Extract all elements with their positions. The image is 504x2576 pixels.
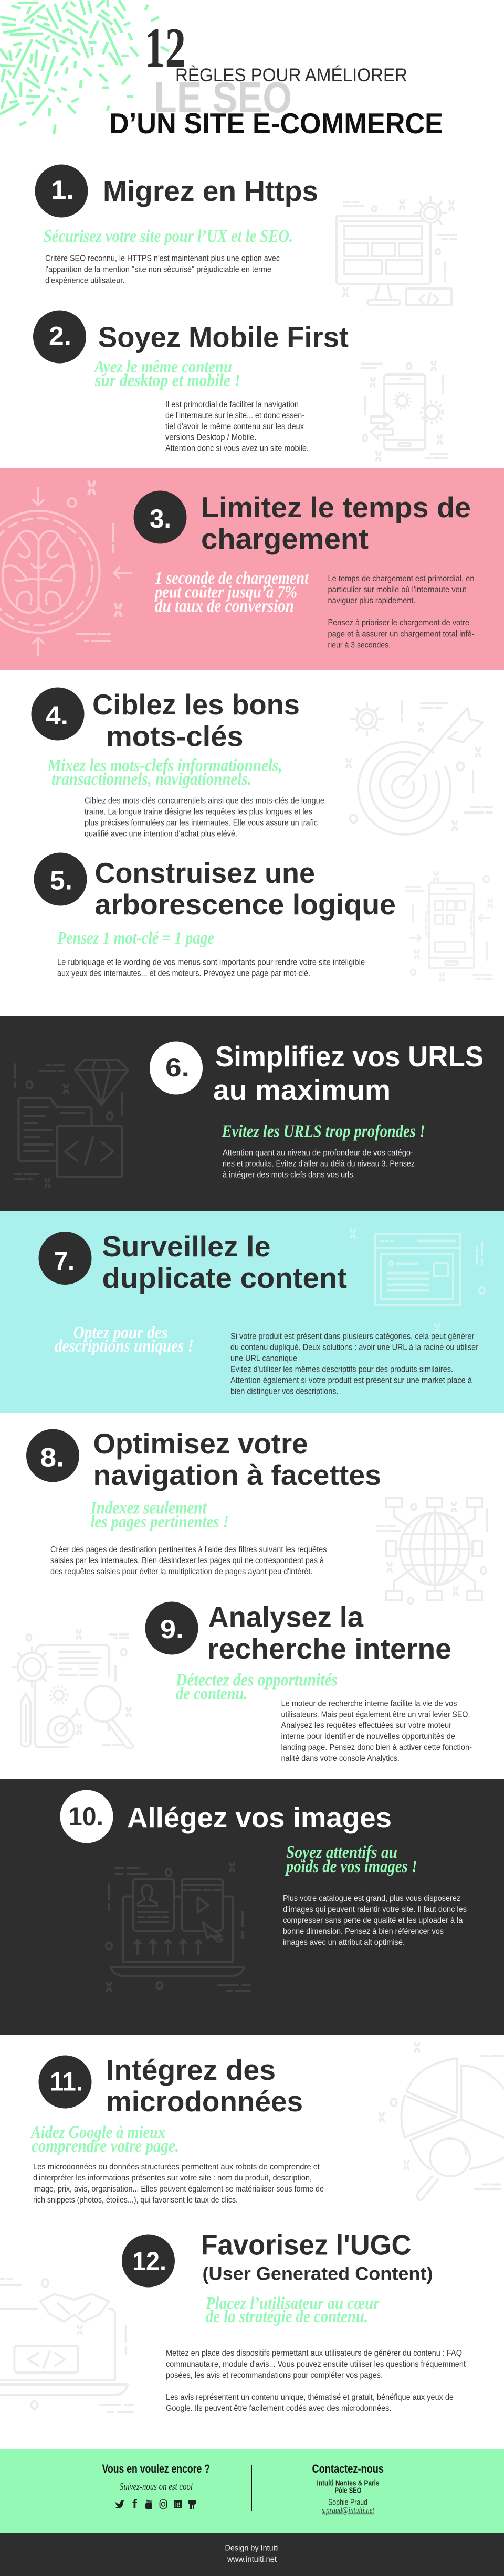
heading 4: Ciblez les bons xyxy=(92,688,300,721)
number badge 9: 9. xyxy=(160,1615,184,1644)
icon: browser window xyxy=(351,1230,485,1332)
icon: laptop with handshake and code xyxy=(0,2279,133,2412)
main title: RÈGLES POUR AMÉLIORER xyxy=(175,65,407,85)
body text 12 xyxy=(166,2349,466,2413)
subtitle 9: de contenu. xyxy=(176,1684,248,1704)
body text 2 xyxy=(165,400,309,453)
number badge 2: 2. xyxy=(49,321,71,350)
icon: diamond, folder and code xyxy=(15,1060,128,1187)
number badge 6 xyxy=(150,1042,203,1094)
body text 3 xyxy=(328,574,475,649)
panel: rule 2 xyxy=(33,311,447,461)
number badge 5 xyxy=(34,853,87,905)
icon: laptop with image upload xyxy=(106,1863,250,1991)
subtitle 10 xyxy=(285,1843,417,1876)
number badge 8 xyxy=(26,1429,79,1482)
heading 6 xyxy=(213,1040,484,1106)
body text 4: plus précises formulées par les internautes. Elle vous assure un trafic xyxy=(85,818,318,828)
body text 9: nalité dans votre console Analytics. xyxy=(281,1754,400,1763)
main title: D’UN SITE E-COMMERCE xyxy=(109,107,443,140)
icon: youtube: You xyxy=(146,2499,152,2504)
body text 6: à intégrer des mots-clefs dans vos urls. xyxy=(223,1171,355,1179)
number badge 3: 3. xyxy=(150,504,171,533)
panel: rule 10 dark band xyxy=(0,1779,504,2035)
subtitle 12: Placez l’utilisateur au cœur xyxy=(205,2294,380,2313)
panel: rule 12 xyxy=(0,2228,466,2413)
subtitle 5: Pensez 1 mot-clé = 1 page xyxy=(57,928,214,948)
body text 11: Les microdonnées ou données structurées permettent aux robots de comprendre et xyxy=(33,2163,320,2172)
subtitle 2: sur desktop et mobile ! xyxy=(94,371,240,390)
subtitle 10: Soyez attentifs au xyxy=(286,1843,397,1862)
body text 12: Google. Ils peuvent être facilement codés avec des microdonnées. xyxy=(166,2404,392,2413)
number badge 4: 4. xyxy=(46,701,68,730)
number badge 4 xyxy=(32,687,84,741)
heading 1: Migrez en Https xyxy=(103,175,318,207)
heading 12: (User Generated Content) xyxy=(203,2264,433,2284)
icon: slideshare xyxy=(188,2500,196,2509)
icon: intuiti xyxy=(174,2500,182,2508)
footer right: contact: Contactez-nous xyxy=(312,2462,384,2475)
body text 10: compresser sans perte de qualité et les uploader à la xyxy=(283,1916,463,1925)
body text 12: Les avis représentent un contenu unique, thématisé et gratuit, bénéfique aux yeux de xyxy=(166,2393,454,2402)
subtitle 7 xyxy=(55,1323,194,1356)
icon: pie chart and magnifier xyxy=(380,2043,504,2200)
body text 2: Il est primordial de faciliter la navigation xyxy=(165,400,299,409)
body text 11: d'interpréter les informations présentes sur votre site : nom du produit, description, xyxy=(33,2174,312,2183)
body text 7: du contenu dupliqué. Deux solutions : avoir une URL à la racine ou utiliser xyxy=(230,1343,478,1352)
body text 2: tiel d'avoir le même contenu sur les deux xyxy=(165,422,304,431)
icon: youtube xyxy=(145,2499,152,2509)
icon: twitter xyxy=(116,2500,124,2508)
heading 3: chargement xyxy=(201,522,369,555)
number badge 3 xyxy=(133,491,187,543)
heading 6: Simplifiez vos URLS xyxy=(215,1040,484,1073)
number badge 6: 6. xyxy=(165,1053,190,1082)
subtitle 11: Aidez Google à mieux xyxy=(30,2123,165,2142)
body text 5: Le rubriquage et le wording de vos menus sont importants pour rendre votre site intéligible xyxy=(57,958,365,967)
body text 7: Evitez d'utiliser les mêmes descriptifs pour des produits similaires. xyxy=(230,1365,453,1374)
footer: dark credit band xyxy=(0,2533,504,2576)
body text 4: Ciblez des mots-clés concurrentiels ainsi que des mots-clés de longue xyxy=(85,796,324,806)
heading 12 xyxy=(201,2228,433,2284)
body text 5: aux yeux des internautes... et des moteurs. Prévoyez une page par mot-clé. xyxy=(57,969,310,978)
number badge 11: 11. xyxy=(50,2067,83,2096)
heading 5: arborescence logique xyxy=(94,888,396,921)
panel: rule 3 pink band xyxy=(0,468,504,670)
subtitle 8 xyxy=(90,1498,229,1532)
subtitle 2 xyxy=(93,357,240,390)
body text 4 xyxy=(85,796,324,838)
subtitle 3: 1 seconde de chargement xyxy=(155,569,309,588)
footer left: follow us: Suivez-nous on est cool xyxy=(120,2481,193,2493)
heading 3: Limitez le temps de xyxy=(201,491,471,523)
number badge 12: 12. xyxy=(132,2247,166,2276)
body text 2: de l'internaute sur le site... et donc essen- xyxy=(165,411,304,420)
subtitle 7: descriptions uniques ! xyxy=(55,1337,194,1356)
body text 3: naviguer plus rapidement. xyxy=(328,596,416,605)
number badge 8: 8. xyxy=(40,1442,64,1472)
body text 12: Mettez en place des dispositifs permettant aux utilisateurs de générer du contenu : FAQ xyxy=(166,2349,462,2358)
subtitle 1: Sécurisez votre site pour l’UX et le SEO. xyxy=(44,227,293,246)
heading 4 xyxy=(92,688,300,752)
subtitle 3 xyxy=(154,569,309,616)
body text 1: l'apparition de la mention "site non sécurisé" préjudiciable en terme xyxy=(45,265,271,274)
footer right: contact: s.praud@intuiti.net xyxy=(322,2506,374,2515)
icon: intuiti: it! xyxy=(175,2501,180,2508)
heading 11: Intégrez des xyxy=(106,2054,276,2086)
panel: rule 1 xyxy=(35,165,318,285)
decorative confetti xyxy=(0,0,169,134)
icon: monitor with gear xyxy=(337,197,456,305)
body text 3: Le temps de chargement est primordial, en xyxy=(328,574,475,583)
number badge 5: 5. xyxy=(50,865,72,895)
body text 9: Le moteur de recherche interne facilite la vie de vos xyxy=(281,1699,457,1708)
footer: green contact band xyxy=(0,2449,504,2533)
number badge 9 xyxy=(145,1602,198,1654)
heading 3 xyxy=(201,491,471,555)
subtitle 9 xyxy=(175,1670,338,1704)
heading 10: Allégez vos images xyxy=(127,1801,392,1834)
body text 2: Attention donc si vous avez un site mobile. xyxy=(165,444,309,453)
subtitle 8: les pages pertinentes ! xyxy=(90,1512,229,1532)
heading 7: duplicate content xyxy=(102,1262,347,1294)
body text 8: saisies par les internautes. Bien désindexer les pages qui ne correspondent pas à xyxy=(50,1556,324,1565)
body text 3: rieur à 3 secondes. xyxy=(328,641,391,649)
number badge 11 xyxy=(39,2055,91,2109)
body text 6: Attention quant au niveau de profondeur de vos catégo- xyxy=(223,1149,413,1157)
subtitle 11 xyxy=(30,2123,179,2156)
subtitle 3: peut coûter jusqu’à 7% xyxy=(154,582,297,602)
heading 4: mots-clés xyxy=(106,720,244,752)
body text 6: ries et produits. Evitez d'aller au délà du niveau 3. Pensez xyxy=(223,1159,415,1169)
panel: rule 8 xyxy=(26,1427,487,1604)
body text 9: utilisateurs. Mais peut également être un vrai levier SEO. xyxy=(281,1710,470,1719)
panel: rule 11 xyxy=(30,2043,504,2205)
panel: rule 4 xyxy=(32,687,492,838)
body text 12: posées, les avis et recommandations pour compléter vos pages. xyxy=(166,2371,383,2380)
panel: rule 6 dark band xyxy=(0,1016,504,1211)
subtitle 10: poids de vos images ! xyxy=(285,1857,417,1876)
heading 5: Construisez une xyxy=(94,857,315,889)
main title xyxy=(109,17,443,140)
subtitle 3: du taux de conversion xyxy=(155,596,294,616)
subtitle 4: Mixez les mots-clefs informationnels, xyxy=(47,756,282,775)
body text 8: Créer des pages de destination pertinentes à l'aide des filtres suivant les requêtes xyxy=(50,1545,327,1554)
icon: instagram xyxy=(160,2500,167,2508)
icon: brain xyxy=(0,482,131,655)
panel: rule 7 teal band xyxy=(0,1211,504,1413)
panel: rule 9 xyxy=(13,1601,472,1763)
body text 4: traine. La longue traine désigne les requêtes les plus longues et les xyxy=(85,808,312,816)
body text 1: d'expérience utilisateur. xyxy=(45,276,125,285)
heading 8: Optimisez votre xyxy=(93,1427,308,1460)
body text 8 xyxy=(50,1545,327,1576)
body text 10: bonne dimension. Pensez à bien référencer vos xyxy=(283,1927,444,1936)
heading 9 xyxy=(207,1601,452,1665)
body text 9 xyxy=(281,1699,472,1763)
body text 11: image, prix, avis, organisation... Elles peuvent également se matérialiser sous forme de xyxy=(33,2185,324,2194)
subtitle 2: Ayez le même contenu xyxy=(93,357,232,377)
heading 2: Soyez Mobile First xyxy=(98,321,349,354)
body text 4: qualifié avec une intention d'achat plus elévé. xyxy=(85,830,237,838)
subtitle 9: Détectez des opportunités xyxy=(175,1670,338,1690)
number badge 2 xyxy=(33,311,86,363)
icon: document, gears and magnifier xyxy=(13,1630,133,1748)
body text 11 xyxy=(33,2163,324,2205)
heading 12: Favorisez l'UGC xyxy=(201,2228,412,2261)
heading 8: navigation à facettes xyxy=(93,1459,381,1491)
icon: phone tree xyxy=(406,872,492,981)
heading 11: microdonnées xyxy=(106,2085,303,2118)
heading 7: Surveillez le xyxy=(102,1230,271,1263)
body text 7: Attention également si votre produit est présent sur une market place à xyxy=(230,1376,472,1385)
footer left: follow us: Vous en voulez encore ? xyxy=(102,2462,210,2475)
subtitle 4: transactionnels, navigationnels. xyxy=(51,769,251,789)
footer: dark credit band: Design by Intuiti xyxy=(225,2544,279,2552)
subtitle 4 xyxy=(47,756,282,789)
body text 10: d'images qui peuvent ralentir votre site. Il faut donc les xyxy=(283,1905,467,1914)
number badge 1 xyxy=(35,165,88,217)
footer: dark credit band: www.intuiti.net xyxy=(227,2555,277,2564)
icon: globe network xyxy=(377,1498,487,1604)
heading 11 xyxy=(106,2054,303,2118)
icon: phone with gears xyxy=(362,362,447,461)
heading 7 xyxy=(102,1230,347,1294)
number badge 10 xyxy=(60,1790,113,1843)
body text 1 xyxy=(45,254,280,285)
body text 8: des requêtes saisies pour éviter la multiplication de pages ayant peu d'intérêt. xyxy=(50,1567,313,1576)
body text 2: versions Desktop / Mobile. xyxy=(165,433,256,442)
icon: facebook: f xyxy=(132,2497,138,2511)
icon: target and arrow xyxy=(346,701,492,835)
body text 3: page et à assurer un chargement total infé- xyxy=(328,629,475,639)
body text 12: communautaire, module d'avis... Vous pouvez ensuite utiliser les questions fréquemment xyxy=(166,2360,466,2369)
body text 11: rich snippets (photos, étoiles...), qui favorisent le taux de clics. xyxy=(33,2196,238,2205)
body text 7: une URL canonique xyxy=(230,1354,297,1363)
panel: rule 5 xyxy=(34,853,492,981)
heading 5 xyxy=(94,857,396,921)
body text 10 xyxy=(283,1894,467,1947)
main title: 12 xyxy=(144,17,186,79)
body text 7 xyxy=(230,1332,478,1396)
footer right: contact: Pôle SEO xyxy=(335,2486,362,2495)
number badge 12 xyxy=(122,2235,175,2287)
subtitle 11: comprendre votre page. xyxy=(32,2136,179,2156)
number badge 10: 10. xyxy=(68,1802,103,1831)
body text 9: Analysez les requêtes effectuées sur votre moteur xyxy=(281,1721,452,1730)
number badge 7 xyxy=(39,1232,91,1285)
footer right: contact: Intuiti Nantes & Paris xyxy=(317,2479,379,2487)
body text 9: interne pour identifier de nouvelles opportunités de xyxy=(281,1732,455,1741)
body text 10: images avec un attribut alt optimisé. xyxy=(283,1938,405,1947)
body text 3: particulier sur mobile où l'internaute veut xyxy=(328,585,467,594)
body text 1: Critère SEO reconnu, le HTTPS n'est maintenant plus une option avec xyxy=(45,254,280,263)
body text 3: Pensez à prioriser le chargement de votre xyxy=(328,618,469,627)
subtitle 6: Evitez les URLS trop profondes ! xyxy=(222,1121,425,1141)
subtitle 12: de la stratégie de contenu. xyxy=(206,2307,368,2326)
body text 9: landing page. Pensez donc bien à activer cette fonction- xyxy=(281,1743,472,1752)
footer right: contact xyxy=(312,2462,384,2515)
footer right: contact: Sophie Praud xyxy=(328,2498,368,2507)
body text 7: bien distinguer vos descriptions. xyxy=(230,1387,338,1396)
body text 5 xyxy=(57,958,365,978)
divider xyxy=(251,2465,252,2511)
heading 9: recherche interne xyxy=(207,1632,452,1665)
heading 6: au maximum xyxy=(213,1074,391,1106)
main title: LE SEO xyxy=(154,73,292,122)
number badge 1: 1. xyxy=(51,175,74,205)
subtitle 7: Optez pour des xyxy=(74,1323,168,1342)
subtitle 12 xyxy=(205,2294,380,2326)
footer left: follow us xyxy=(102,2462,210,2511)
heading 9: Analysez la xyxy=(208,1601,363,1633)
body text 10: Plus votre catalogue est grand, plus vous disposerez xyxy=(283,1894,460,1903)
body text 6 xyxy=(223,1149,415,1179)
body text 7: Si votre produit est présent dans plusieurs catégories, cela peut générer xyxy=(230,1332,475,1341)
subtitle 8: Indexez seulement xyxy=(90,1498,207,1518)
number badge 7: 7. xyxy=(54,1246,75,1276)
heading 8 xyxy=(93,1427,381,1491)
